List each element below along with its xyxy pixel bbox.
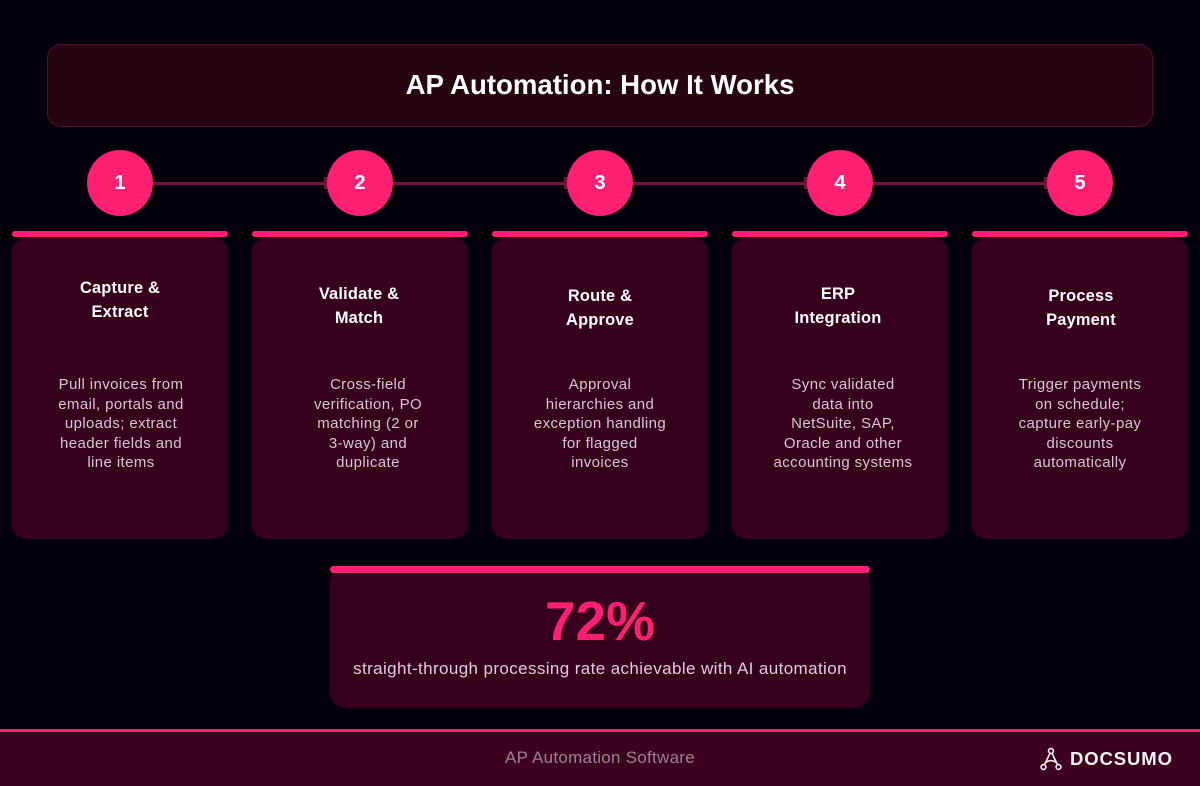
card accent 5 [972, 231, 1188, 237]
body text 1: Pull invoices from [59, 376, 183, 393]
body text 5: Trigger payments [1019, 376, 1141, 393]
heading 3 [566, 287, 634, 329]
step circle 5 [1047, 150, 1113, 216]
body text 3: Approval [569, 376, 631, 393]
body text 2 [314, 376, 422, 471]
step circle 5: 5 [1074, 172, 1086, 194]
arrow head 3 [564, 177, 569, 189]
arrow head 5 [1044, 177, 1049, 189]
body text 1: header fields and [60, 435, 182, 452]
body text 3 [534, 376, 666, 471]
heading 3: Approve [566, 311, 634, 329]
card panel 5 [972, 238, 1188, 539]
logo [1040, 748, 1173, 770]
body text 1: line items [87, 454, 155, 471]
body text 2: verification, PO [314, 396, 422, 413]
body text 3: exception handling [534, 415, 666, 432]
heading 4 [795, 285, 881, 327]
card accent 2 [252, 231, 468, 237]
arrow head 4 [804, 177, 809, 189]
body text 3: for flagged [562, 435, 638, 452]
body text 4: Oracle and other [784, 435, 902, 452]
card panel 1 [12, 238, 228, 539]
step circle 4 [807, 150, 873, 216]
step circle 1: 1 [114, 172, 126, 194]
card panel 2 [252, 238, 468, 539]
body text 2: 3-way) and [329, 435, 407, 452]
heading 2: Match [335, 309, 383, 327]
stat number: 72% [545, 590, 655, 652]
card panel 4 [732, 238, 948, 539]
title banner [47, 44, 1153, 127]
body text 2: matching (2 or [317, 415, 419, 432]
step circle 2 [327, 150, 393, 216]
body text 2: duplicate [336, 454, 400, 471]
card accent 3 [492, 231, 708, 237]
heading 1: Capture & [80, 279, 160, 297]
heading 4: ERP [821, 285, 855, 303]
heading 1 [80, 279, 160, 321]
heading 4: Integration [795, 309, 881, 327]
heading 1: Extract [92, 303, 148, 321]
heading 5: Process [1048, 287, 1114, 305]
card panel 3 [492, 238, 708, 539]
logo wordmark: DOCSUMO [1070, 748, 1173, 769]
heading 5: Payment [1046, 311, 1116, 329]
body text 5: on schedule; [1035, 396, 1125, 413]
body text 4: accounting systems [774, 454, 912, 471]
card accent 4 [732, 231, 948, 237]
step circle 1 [87, 150, 153, 216]
body text 3: invoices [571, 454, 629, 471]
body text 1: uploads; extract [65, 415, 177, 432]
stat accent bar [330, 566, 870, 573]
body text 5: discounts [1046, 435, 1113, 452]
step circle 2: 2 [354, 172, 366, 194]
stat panel [330, 566, 870, 708]
body text 4: NetSuite, SAP, [791, 415, 895, 432]
heading 2 [319, 285, 399, 327]
step circle 4: 4 [834, 172, 846, 194]
arrow head 2 [324, 177, 329, 189]
step circle 3 [567, 150, 633, 216]
stat caption: straight-through processing rate achievable with AI automation [353, 659, 847, 678]
step circle 3: 3 [594, 172, 606, 194]
heading 5 [1046, 287, 1116, 329]
icon: docsumo mark [1040, 748, 1062, 770]
body text 1 [58, 376, 184, 471]
card accent 1 [12, 231, 228, 237]
body text 3: hierarchies and [546, 396, 654, 413]
body text 5 [1019, 376, 1141, 471]
body text 1: email, portals and [58, 396, 184, 413]
body text 5: automatically [1034, 454, 1126, 471]
body text 4: Sync validated [791, 376, 895, 393]
heading 2: Validate & [319, 285, 399, 303]
heading 3: Route & [568, 287, 632, 305]
connector line [150, 182, 1050, 185]
body text 5: capture early-pay [1019, 415, 1141, 432]
body text 4: data into [812, 396, 874, 413]
body text 4 [774, 376, 912, 471]
title banner: AP Automation: How It Works [406, 69, 794, 100]
footer text: AP Automation Software [505, 748, 695, 767]
body text 2: Cross-field [330, 376, 406, 393]
footer bar [0, 729, 1200, 786]
